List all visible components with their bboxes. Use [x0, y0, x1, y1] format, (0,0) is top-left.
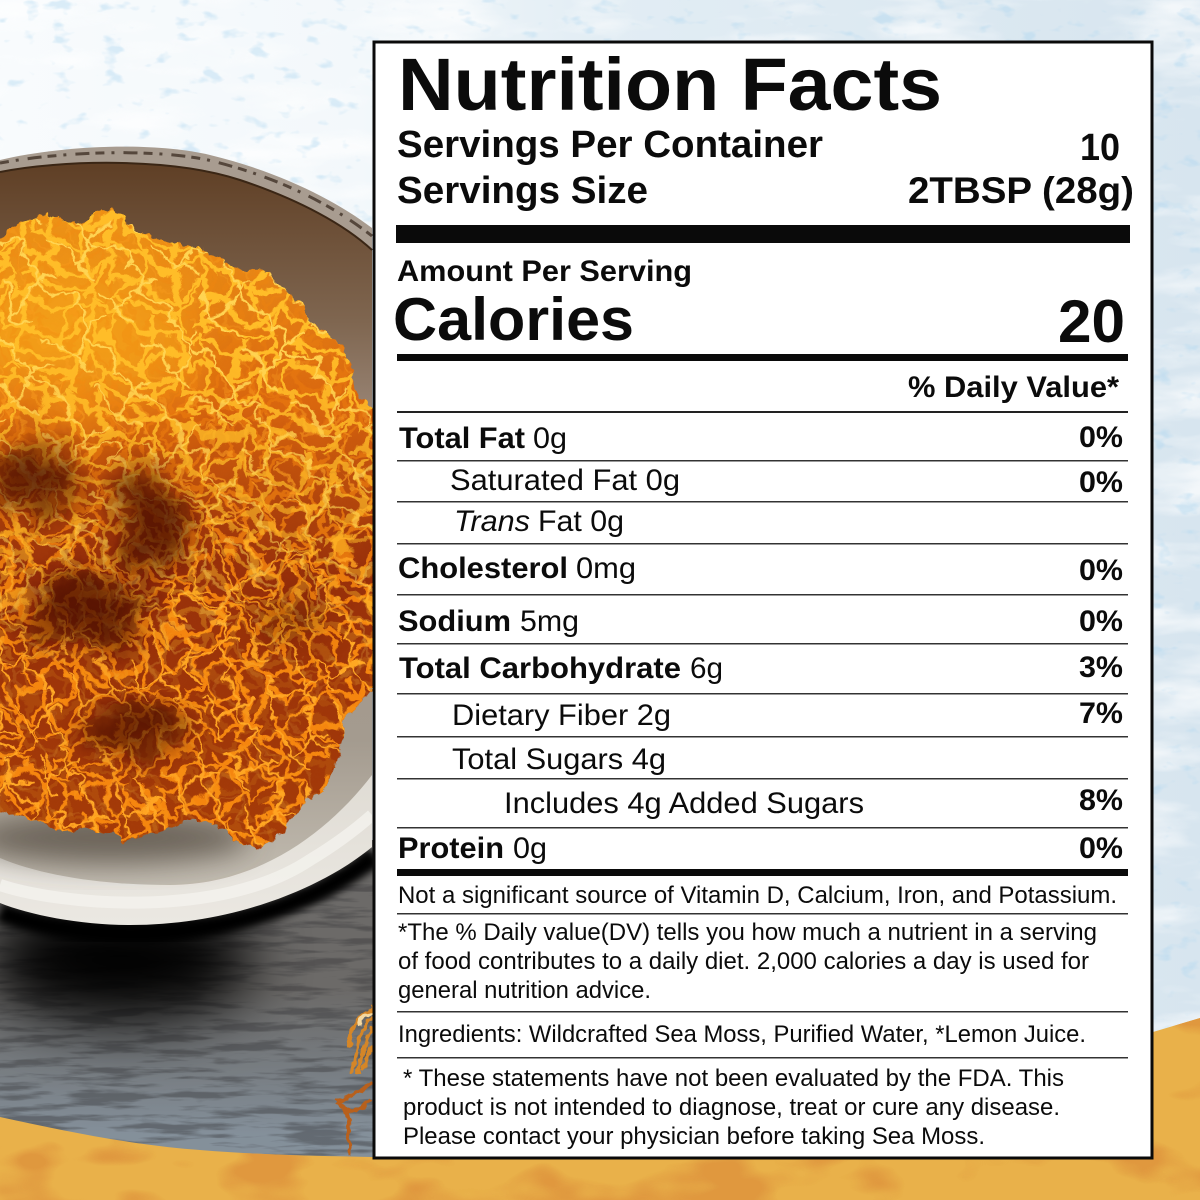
- bowl: [0, 147, 372, 925]
- row: sodium: Sodium: [398, 605, 511, 638]
- table surface: [0, 840, 375, 1165]
- FDA disclaimer: [403, 1065, 1064, 1150]
- dark core of the pile: [0, 448, 330, 756]
- vitamin note: Not a significant source of Vitamin D, Calcium, Iron, and Potassium.: [398, 882, 1117, 909]
- row: total carbohydrate: Total Carbohydrate: [399, 652, 681, 685]
- row: trans fat: Fat 0g: [538, 505, 624, 538]
- row: protein: 0g: [513, 832, 547, 865]
- interior shadow under moss: [0, 812, 250, 864]
- row: dietary fiber: [452, 697, 1123, 732]
- row: cholesterol: [398, 552, 1123, 587]
- serving size: Servings Size: [397, 170, 648, 212]
- row: saturated fat: [450, 464, 1123, 499]
- amount per serving: Amount Per Serving: [397, 255, 692, 288]
- row: trans fat: [454, 505, 624, 538]
- row: added sugars: Includes 4g Added Sugars: [504, 787, 864, 820]
- row: sodium: [398, 605, 1123, 638]
- strands: [0, 210, 372, 847]
- panel background: [374, 42, 1152, 1158]
- row: protein: 0%: [1079, 832, 1123, 865]
- daily value footnote: general nutrition advice.: [398, 977, 651, 1004]
- title: Nutrition Facts: [398, 43, 942, 126]
- bottom yellow wave: [0, 1000, 1200, 1200]
- bright lip highlight: [0, 815, 372, 903]
- serving size: [397, 170, 1134, 212]
- row: protein: [398, 832, 1123, 865]
- FDA disclaimer: Please contact your physician before taking Sea Moss.: [403, 1123, 985, 1150]
- row: total sugars: Total Sugars 4g: [452, 743, 666, 776]
- nutrition facts panel: [374, 42, 1152, 1158]
- calories: 20: [1058, 288, 1125, 355]
- row: protein: Protein: [398, 832, 504, 865]
- row: dietary fiber: Dietary Fiber 2g: [452, 699, 671, 732]
- row: saturated fat: 0%: [1079, 466, 1123, 499]
- row: total carbohydrate: [399, 651, 1123, 685]
- row: total fat: 0g: [533, 422, 567, 455]
- row: trans fat: Trans: [454, 505, 530, 538]
- row: cholesterol: 0%: [1079, 554, 1123, 587]
- daily value footnote: *The % Daily value(DV) tells you how much a nutrient in a serving: [398, 919, 1097, 946]
- row: added sugars: 8%: [1079, 784, 1123, 817]
- bowl interior: [0, 163, 372, 885]
- FDA disclaimer: product is not intended to diagnose, treat or cure any disease.: [403, 1094, 1060, 1121]
- daily value header: % Daily Value*: [908, 371, 1119, 404]
- speckled rim edge: [0, 153, 372, 236]
- interior top edge: [0, 163, 372, 250]
- row: total carbohydrate: 3%: [1079, 651, 1123, 684]
- row: total carbohydrate: 6g: [690, 652, 723, 685]
- daily value footnote: [398, 919, 1097, 1004]
- daily value footnote: of food contributes to a daily diet. 2,000 calories a day is used for: [398, 948, 1089, 975]
- calories: [393, 286, 1125, 355]
- row: total fat: [399, 421, 1123, 455]
- servings per container: Servings Per Container: [397, 124, 823, 166]
- row: added sugars: [504, 784, 1123, 820]
- dark contact band under the bowl: [0, 856, 375, 934]
- row: cholesterol: 0mg: [576, 552, 636, 585]
- servings per container: [397, 124, 1120, 169]
- serving size: 2TBSP (28g): [908, 170, 1134, 211]
- row: dietary fiber: 7%: [1079, 697, 1123, 730]
- row: sodium: 5mg: [520, 605, 579, 638]
- calories: Calories: [393, 286, 634, 353]
- row: cholesterol: Cholesterol: [398, 552, 568, 585]
- sea moss pile: [0, 207, 372, 850]
- bowl cast shadow: [0, 898, 255, 1022]
- bowl rim and outer lip: [0, 147, 372, 925]
- row: total fat: 0%: [1079, 421, 1123, 454]
- ingredients: Ingredients: Wildcrafted Sea Moss, Purified Water, *Lemon Juice.: [398, 1021, 1086, 1048]
- stray moss clump on table: [338, 1008, 373, 1156]
- row: total fat: Total Fat: [399, 422, 525, 455]
- row: sodium: 0%: [1079, 605, 1123, 638]
- servings per container: 10: [1080, 127, 1120, 169]
- bright gold crown glow: [0, 270, 200, 410]
- FDA disclaimer: * These statements have not been evaluated by the FDA. This: [403, 1065, 1064, 1092]
- row: saturated fat: Saturated Fat 0g: [450, 464, 680, 497]
